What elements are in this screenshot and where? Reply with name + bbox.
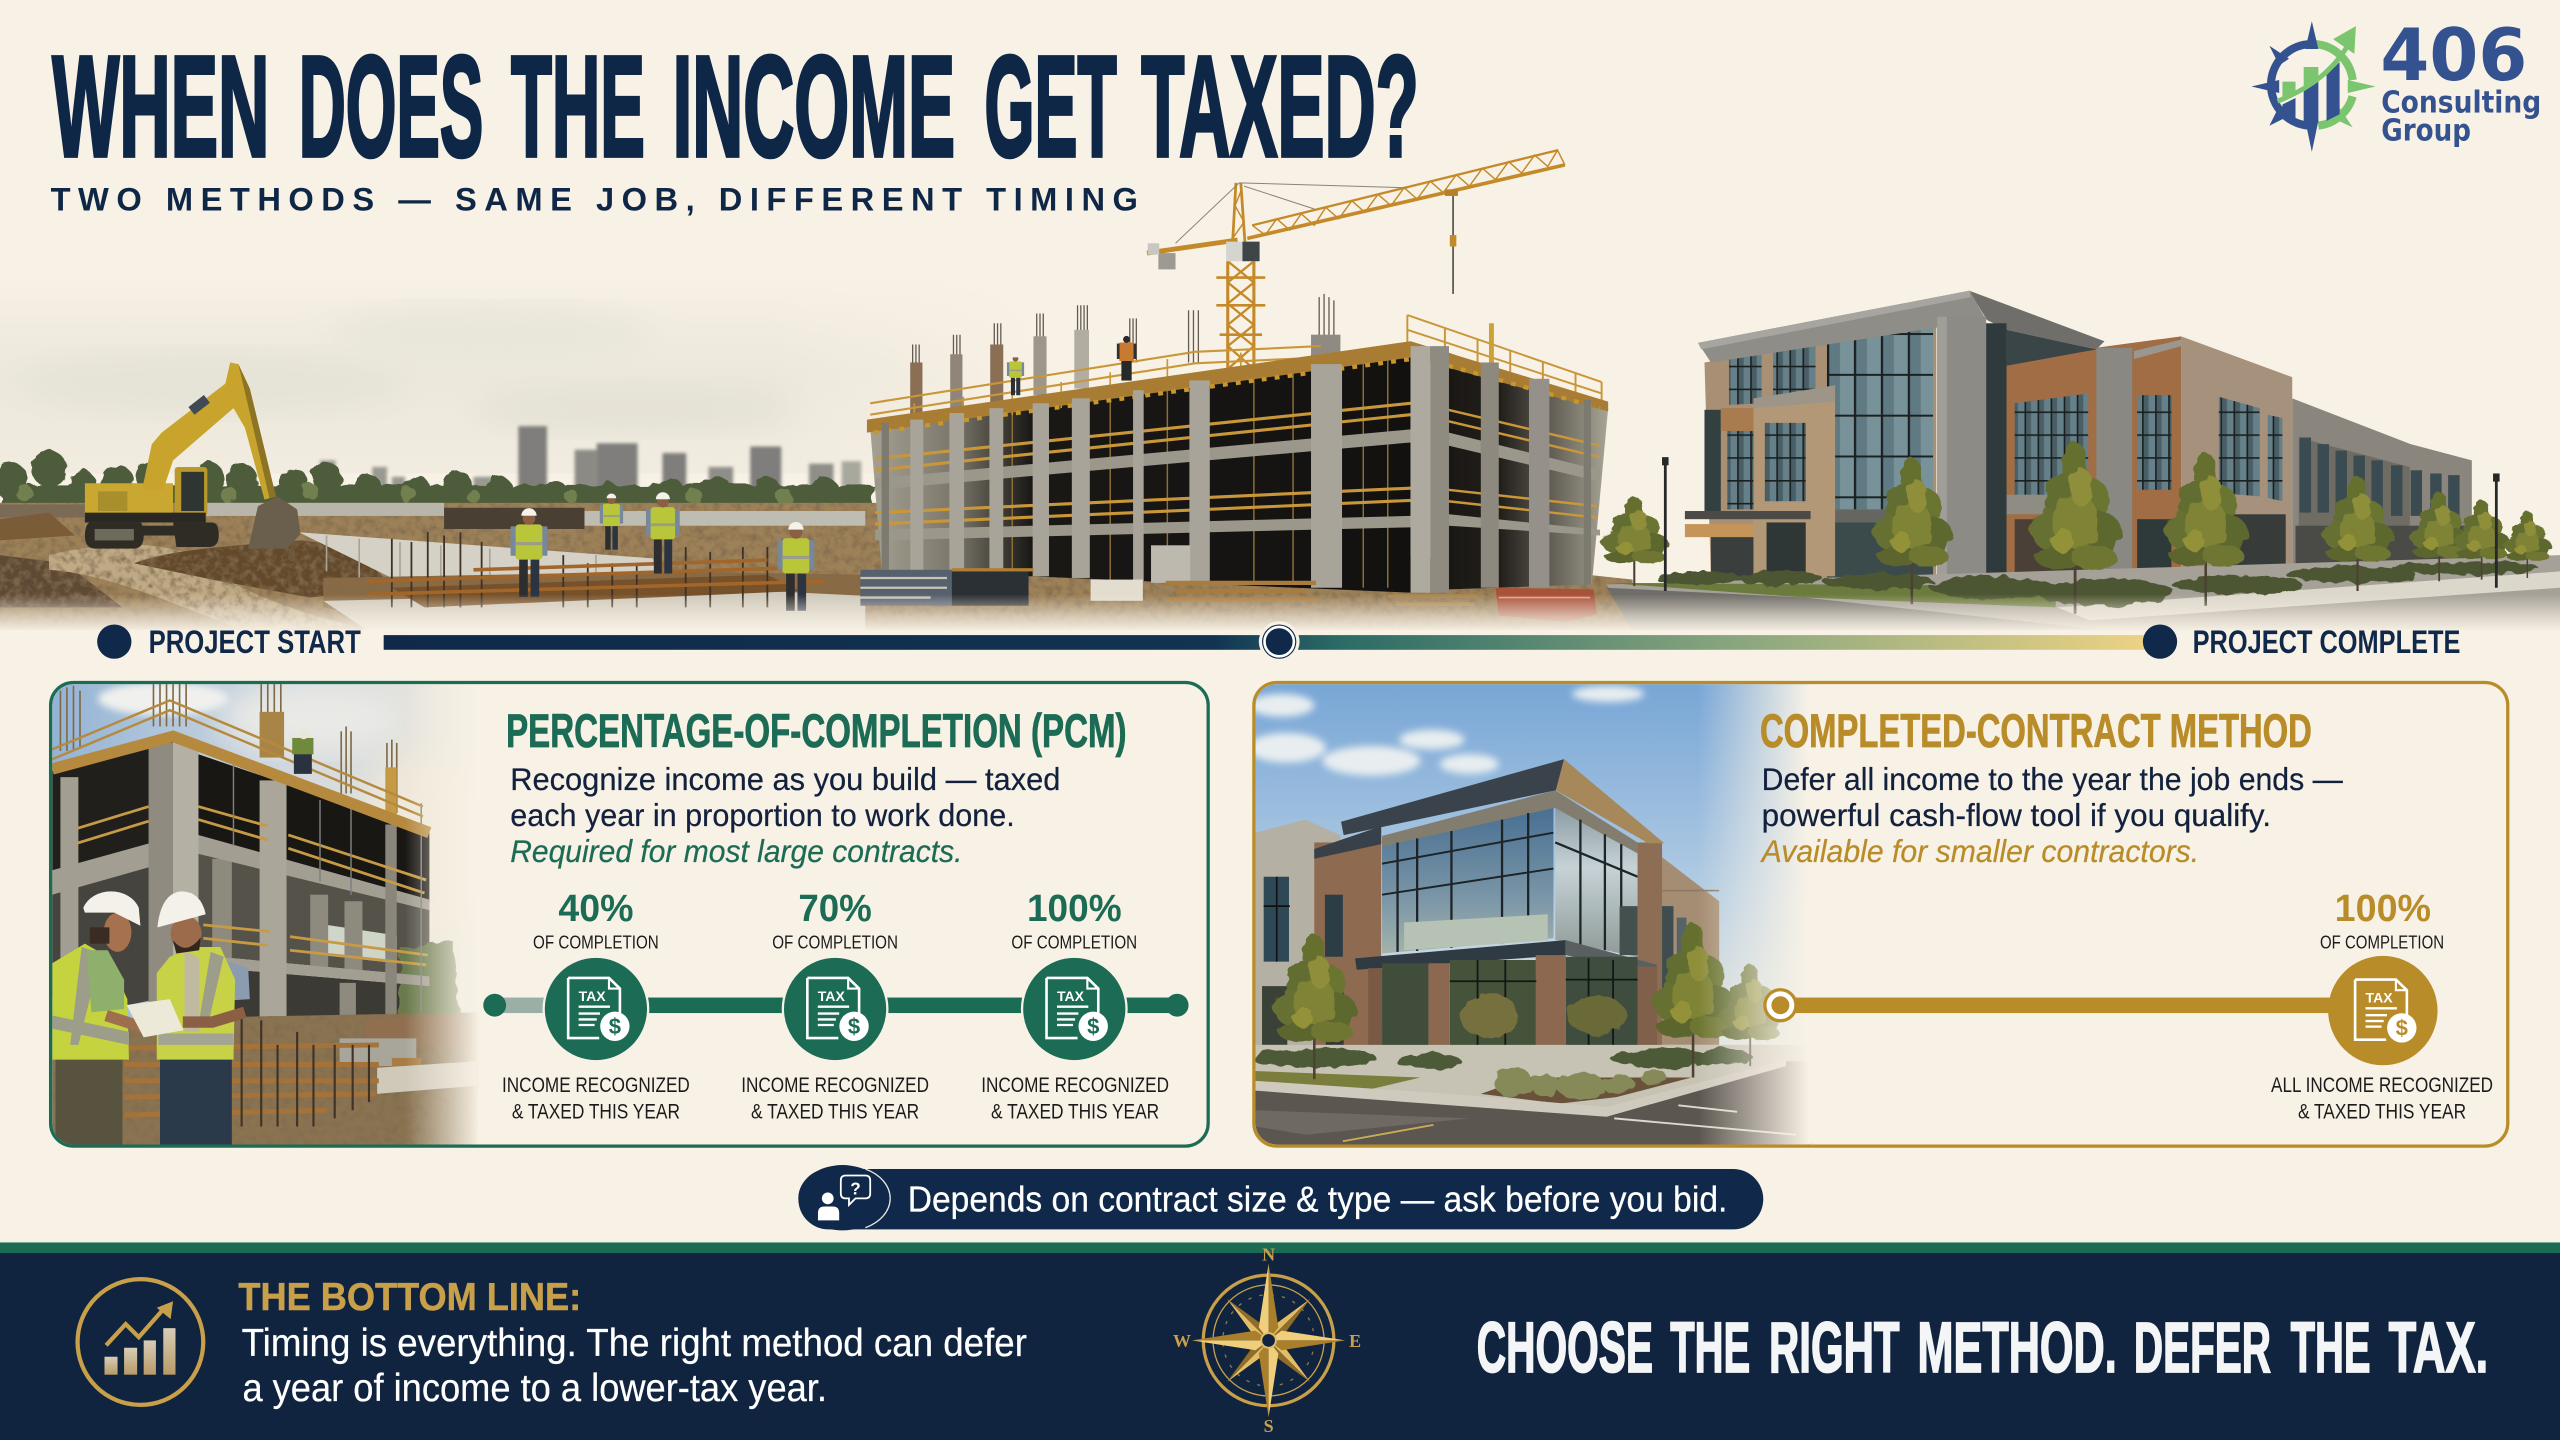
corner pier xyxy=(1937,317,1986,581)
engineer right xyxy=(157,891,250,1144)
closing slogan: THE xyxy=(1670,1308,1750,1388)
stage 100%: TAX xyxy=(2366,989,2393,1005)
roof fascia xyxy=(1341,759,1564,835)
slabs and columns xyxy=(52,777,429,1025)
logo: 406 Consulting Group xyxy=(2251,13,2541,152)
front curtain wall xyxy=(1382,808,1553,953)
panel heading: COMPLETED-CONTRACT METHOD xyxy=(1760,705,2312,758)
start label: PROJECT START xyxy=(149,623,361,660)
timeline bar xyxy=(384,635,2147,650)
stage 100%: 100% xyxy=(1027,887,1122,929)
footer band xyxy=(0,1242,2560,1440)
icon: gold compass rose: E xyxy=(1349,1331,1361,1351)
stage 70%: OF COMPLETION xyxy=(772,932,898,953)
road, lawn and shrubs xyxy=(1607,555,2560,630)
description: Defer all income to the year the job ends — xyxy=(1762,761,2343,797)
logo wordmark: 406 xyxy=(2380,13,2527,97)
trees xyxy=(1273,934,1357,1079)
icon: gold compass rose xyxy=(1173,1244,1361,1436)
description xyxy=(1760,761,2343,869)
stage 100%: & TAXED THIS YEAR xyxy=(2298,1100,2466,1123)
icon: gold compass rose: W xyxy=(1173,1331,1191,1351)
icon: person with question bubble xyxy=(798,1165,890,1230)
closing slogan: TAX. xyxy=(2389,1308,2488,1388)
stage 100%: ALL INCOME RECOGNIZED xyxy=(2271,1074,2493,1097)
long wing xyxy=(2292,398,2472,584)
icon: gold compass rose: N xyxy=(1262,1244,1275,1264)
stage 40%: TAX xyxy=(579,988,606,1004)
rooftop workers xyxy=(1007,336,1136,395)
title: WHEN xyxy=(52,27,269,187)
closing slogan: CHOOSE xyxy=(1477,1308,1653,1388)
stage 70%: $ xyxy=(848,1014,860,1039)
hazy sky xyxy=(0,245,1045,473)
panel: completed-contract method xyxy=(1247,682,2508,1146)
left concrete wing xyxy=(1256,820,1340,1053)
tower crane xyxy=(1147,150,1565,369)
excavator xyxy=(85,362,300,549)
icon: person with question bubble: ? xyxy=(850,1178,861,1198)
completed office building xyxy=(1685,291,2472,584)
closing slogan: THE xyxy=(2291,1308,2371,1388)
stage 70%: TAX xyxy=(818,988,845,1004)
stage 100%: TAX xyxy=(1057,988,1085,1004)
roof fascia xyxy=(1698,291,1986,362)
timber deck and rail xyxy=(52,700,429,833)
ground storey xyxy=(1382,963,1429,1056)
start marker xyxy=(97,624,131,659)
brick pier xyxy=(1638,842,1662,1050)
stage 40%: 40% xyxy=(558,887,633,929)
single stage timeline xyxy=(1765,990,2335,1021)
stage timeline xyxy=(483,994,1189,1017)
stage 100%: 100% xyxy=(2335,887,2431,929)
stage 100%: $ xyxy=(2396,1016,2408,1041)
stage 70%: INCOME RECOGNIZED xyxy=(741,1074,929,1097)
description: Recognize income as you build — taxed xyxy=(510,761,1060,797)
title xyxy=(52,27,1419,187)
stage 70%: 70% xyxy=(798,887,872,929)
logo wordmark xyxy=(2380,13,2541,148)
description: each year in proportion to work done. xyxy=(510,797,1015,833)
brick wing xyxy=(1314,842,1381,1050)
icon: compass and growth chart xyxy=(2251,21,2376,152)
building under construction xyxy=(860,294,1608,622)
side curtain wall xyxy=(1555,808,1638,957)
closing slogan: DEFER xyxy=(2134,1308,2271,1388)
description: powerful cash-flow tool if you qualify. xyxy=(1762,797,2271,833)
stage 40%: INCOME RECOGNIZED xyxy=(502,1074,690,1097)
logo wordmark: Consulting xyxy=(2381,86,2541,121)
title: DOES xyxy=(299,27,483,187)
stage 70%: & TAXED THIS YEAR xyxy=(751,1100,919,1123)
concrete columns xyxy=(882,346,1591,593)
rebar column stubs xyxy=(910,294,1340,415)
scaffold verticals xyxy=(1012,356,1388,588)
end marker xyxy=(2143,624,2177,659)
roof worker xyxy=(292,730,313,774)
title: THE xyxy=(511,27,645,187)
stage 40%: & TAXED THIS YEAR xyxy=(512,1100,680,1123)
stub rebars xyxy=(60,682,397,813)
upper spandrel xyxy=(1382,790,1638,854)
bottom line text xyxy=(242,1322,1027,1410)
street trees and lamps xyxy=(1601,441,2552,614)
concrete slabs xyxy=(875,429,1600,540)
subtitle: TWO METHODS — SAME JOB, DIFFERENT TIMING xyxy=(51,181,1138,218)
scaffold rails xyxy=(77,807,428,965)
callout text: Depends on contract size & type — ask before you bid. xyxy=(908,1178,1727,1219)
stage 40%: OF COMPLETION xyxy=(533,932,659,953)
end label: PROJECT COMPLETE xyxy=(2193,623,2460,660)
stage 40% xyxy=(502,887,690,1123)
logo wordmark: Group xyxy=(2381,113,2471,148)
title: GET xyxy=(984,27,1117,187)
stage 100%: OF COMPLETION xyxy=(2320,932,2444,953)
stacked materials xyxy=(860,545,1597,622)
tree line xyxy=(0,451,875,508)
stage 40%: $ xyxy=(609,1014,621,1039)
closing slogan: METHOD. xyxy=(1918,1308,2117,1388)
icon: rising bar chart in ring xyxy=(78,1279,203,1405)
inner columns xyxy=(212,859,362,1024)
stone block xyxy=(2181,336,2292,584)
right wall xyxy=(1662,857,1719,1045)
project timeline xyxy=(97,621,2460,662)
panel background xyxy=(1254,682,2508,1146)
bottom line text: a year of income to a lower-tax year. xyxy=(242,1367,827,1410)
construction ground xyxy=(0,503,1633,630)
panel heading: PERCENTAGE-OF-COMPLETION (PCM) xyxy=(506,705,1127,758)
stage 70% xyxy=(741,887,929,1123)
landscaping xyxy=(1256,1045,1812,1110)
description xyxy=(510,761,1060,869)
orange scaffold rails xyxy=(870,315,1602,524)
mid band xyxy=(1355,940,1566,970)
left face interior xyxy=(52,736,173,996)
stage 100%: $ xyxy=(1087,1014,1099,1039)
closing slogan: RIGHT xyxy=(1769,1308,1900,1388)
closing slogan xyxy=(1477,1308,2488,1388)
stage 100%: OF COMPLETION xyxy=(1011,932,1137,953)
site workers xyxy=(511,492,814,611)
bottom line heading: THE BOTTOM LINE: xyxy=(238,1276,581,1319)
stage 100% xyxy=(981,887,1169,1123)
brick centre block xyxy=(2002,336,2181,584)
timber deck xyxy=(867,341,1608,433)
clipboard xyxy=(127,999,183,1037)
photo: finished building xyxy=(1247,684,1833,1144)
hero illustration: construction timeline scene xyxy=(0,150,2560,632)
solid band behind timeline xyxy=(0,630,2560,1242)
title: INCOME xyxy=(673,27,955,187)
midpoint marker xyxy=(1259,621,1300,662)
description: Required for most large contracts. xyxy=(510,833,962,869)
description: Available for smaller contractors. xyxy=(1760,833,2199,869)
stage 100%: INCOME RECOGNIZED xyxy=(981,1074,1169,1097)
right face interior xyxy=(198,754,429,903)
bottom line text: Timing is everything. The right method can defer xyxy=(242,1322,1027,1365)
icon: gold compass rose: S xyxy=(1264,1416,1274,1436)
callout pill xyxy=(798,1165,1763,1230)
bottom mist fade xyxy=(0,594,2560,632)
panel background xyxy=(51,682,1208,1146)
stage 100% xyxy=(2271,887,2493,1123)
distant skyline xyxy=(320,426,861,497)
ground and materials xyxy=(52,1012,480,1144)
photo: site engineers xyxy=(52,684,476,1144)
panel: percentage-of-completion xyxy=(51,682,1208,1146)
engineer left xyxy=(52,891,147,1144)
stage 100%: & TAXED THIS YEAR xyxy=(991,1100,1159,1123)
main left facade xyxy=(1704,323,1936,581)
text: TAXED? xyxy=(1141,27,1419,187)
